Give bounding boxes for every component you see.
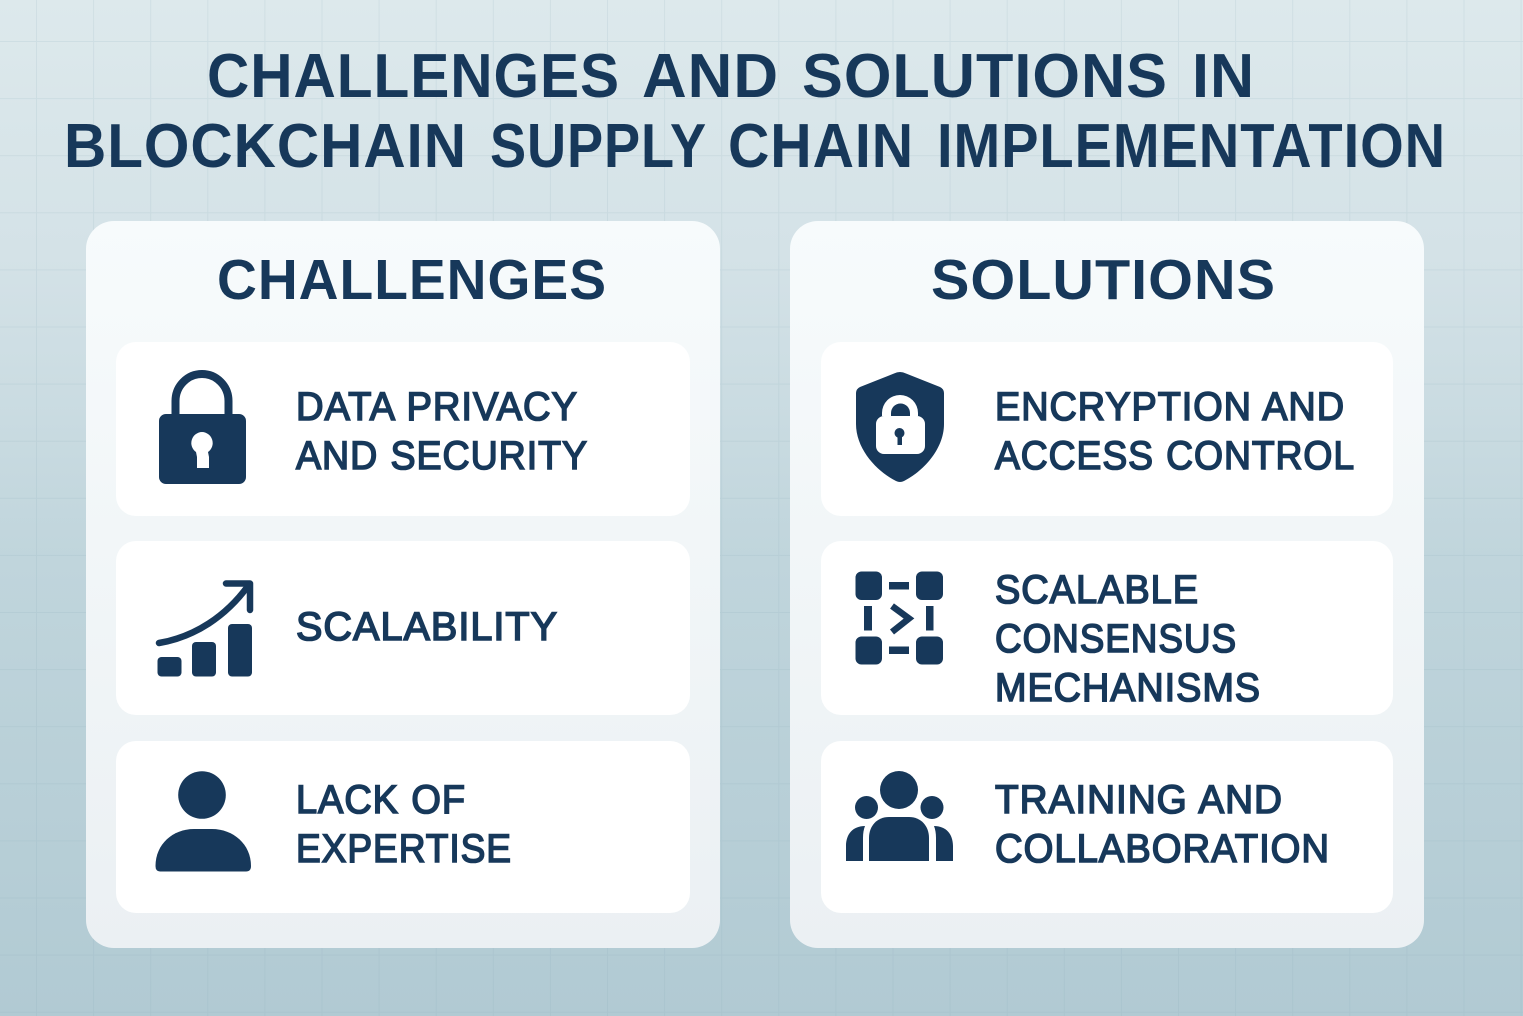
card: scalable consensus mechanisms: MECHANISMS [995, 666, 1261, 710]
label: LACK OF [296, 778, 466, 822]
title: CHALLENGES [207, 42, 620, 111]
icon: team [846, 771, 953, 861]
title: AND [642, 42, 779, 111]
card: lack of expertise [116, 741, 690, 913]
title: IN [1192, 42, 1255, 111]
panel: challenges [86, 221, 720, 948]
card: scalability [116, 541, 690, 715]
panel: solutions [790, 221, 1424, 948]
title: SUPPLY [490, 112, 707, 181]
card: lack of expertise: EXPERTISE [296, 827, 512, 871]
card: training and collaboration [821, 741, 1393, 913]
icon: person [156, 771, 251, 872]
heading: solutions: SOLUTIONS [931, 248, 1276, 312]
title: BLOCKCHAIN [64, 112, 467, 181]
icon: shield with lock [856, 372, 944, 482]
card: data privacy and security: AND SECURITY [296, 434, 588, 478]
label: SCALABILITY [296, 605, 558, 649]
label: DATA PRIVACY [296, 385, 578, 429]
icon: consensus nodes [856, 572, 943, 664]
label: TRAINING AND [995, 778, 1283, 822]
title: CHAIN [728, 112, 914, 181]
card: scalable consensus mechanisms [821, 541, 1393, 715]
label: ENCRYPTION AND [995, 385, 1345, 429]
title: SOLUTIONS [802, 42, 1168, 111]
heading: challenges: CHALLENGES [217, 248, 607, 312]
card: scalable consensus mechanisms: CONSENSUS [995, 617, 1237, 661]
card: encryption and access control [821, 342, 1393, 516]
card: training and collaboration: COLLABORATION [995, 827, 1330, 871]
label: SCALABLE [995, 568, 1199, 612]
card: data privacy and security [116, 342, 690, 516]
title: IMPLEMENTATION [937, 112, 1446, 181]
icon: padlock [159, 374, 246, 484]
icon: growth chart [158, 584, 252, 676]
card: encryption and access control: ACCESS CONTROL [995, 434, 1355, 478]
title [64, 42, 1446, 181]
